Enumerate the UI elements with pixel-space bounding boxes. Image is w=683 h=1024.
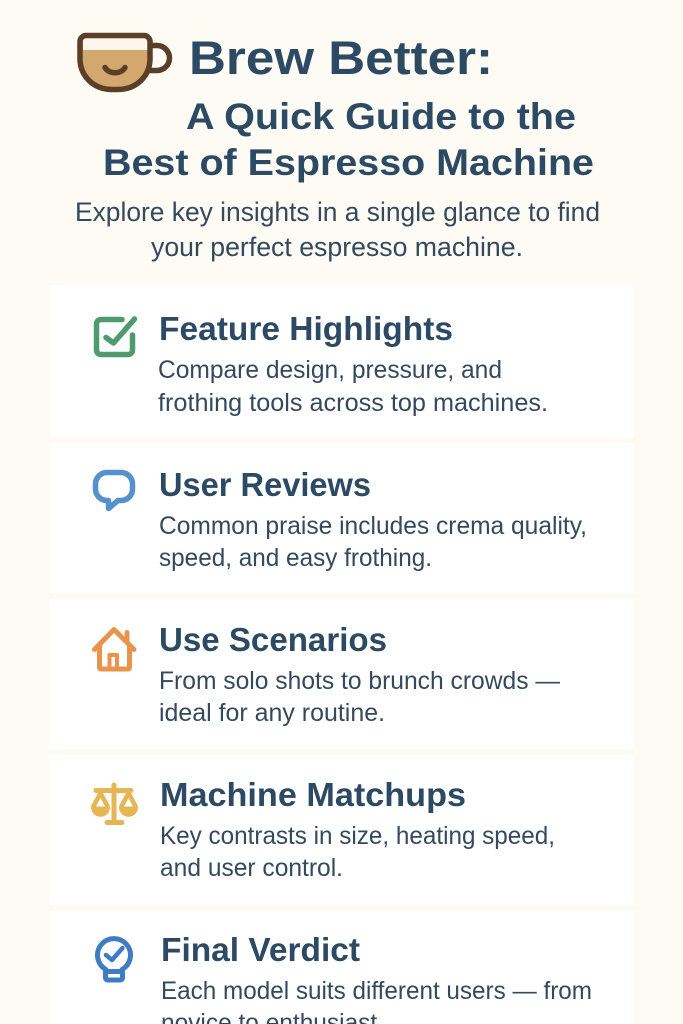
body text: and user control. [160, 854, 343, 882]
body text [161, 977, 592, 1024]
icon: orange house [94, 630, 134, 669]
icon: blue lightbulb with check [98, 939, 130, 980]
icon: smiling coffee cup [80, 36, 170, 90]
body text [158, 356, 548, 417]
body text: Compare design, pressure, and [158, 356, 502, 384]
body text: Common praise includes crema quality, [159, 512, 587, 540]
title: Brew Better: [189, 31, 493, 84]
panel: feature highlights [50, 285, 634, 438]
heading: Final Verdict [161, 931, 360, 968]
heading: Use Scenarios [159, 621, 387, 658]
body text [160, 822, 555, 882]
body text [159, 512, 587, 572]
title: A Quick Guide to the [186, 96, 576, 137]
panel: use scenarios [50, 599, 634, 749]
subtitle: your perfect espresso machine. [151, 232, 523, 262]
icon: green checkbox [96, 319, 134, 354]
panel: user reviews [50, 443, 634, 593]
heading: Feature Highlights [159, 310, 453, 347]
panel: final verdict [50, 911, 634, 1024]
subtitle [75, 197, 600, 262]
body text: From solo shots to brunch crowds — [159, 667, 560, 695]
icon: yellow balance scale [92, 785, 137, 822]
title: Best of Espresso Machine [103, 142, 594, 183]
body text: speed, and easy frothing. [159, 544, 432, 572]
icon: blue speech bubble [96, 472, 132, 508]
body text [159, 667, 560, 727]
body text: ideal for any routine. [159, 699, 385, 727]
body text: Key contrasts in size, heating speed, [160, 822, 555, 850]
body text: frothing tools across top machines. [158, 389, 548, 417]
heading: User Reviews [159, 466, 371, 503]
heading: Machine Matchups [160, 776, 466, 813]
subtitle: Explore key insights in a single glance to find [75, 197, 600, 227]
title [103, 31, 594, 183]
panel: machine matchups [50, 755, 634, 905]
body text: Each model suits different users — from [161, 977, 592, 1005]
